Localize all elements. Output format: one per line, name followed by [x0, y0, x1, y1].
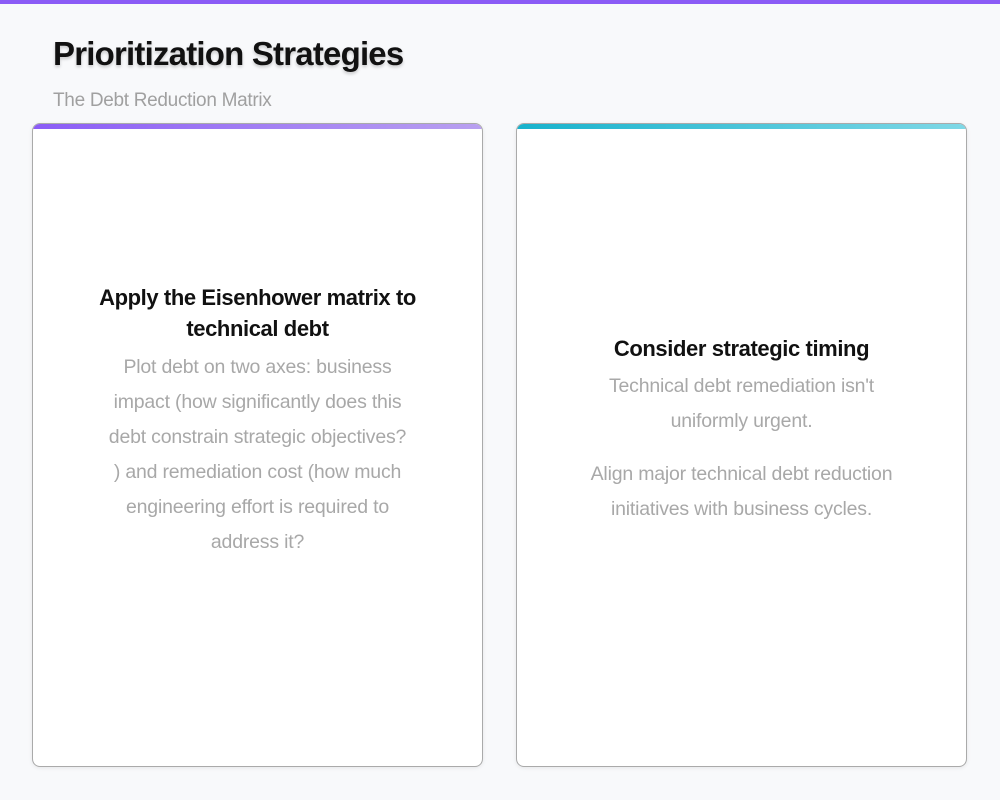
text: timing body: Technical debt remediation isn't: [609, 375, 874, 397]
panel: eisenhower matrix: [32, 123, 483, 767]
text: timing body: uniformly urgent.: [671, 410, 812, 432]
subtitle: The Debt Reduction Matrix: [53, 90, 272, 111]
heading: eisenhower: technical debt: [186, 316, 329, 341]
text: eisenhower body: debt constrain strategic objectives?: [109, 426, 406, 448]
text: eisenhower body: [109, 356, 406, 553]
heading: timing: Consider strategic timing: [614, 336, 869, 361]
title: Prioritization Strategies: [53, 35, 403, 72]
text: eisenhower body: Plot debt on two axes: business: [123, 356, 392, 378]
text: eisenhower body: engineering effort is required to: [126, 496, 389, 518]
panel: strategic timing: [516, 123, 967, 767]
heading: eisenhower: Apply the Eisenhower matrix to: [99, 285, 416, 310]
text: eisenhower body: address it?: [211, 531, 304, 553]
text: timing body: Align major technical debt reduction: [591, 463, 892, 485]
heading: eisenhower: [99, 285, 416, 341]
text: timing body: [590, 375, 892, 520]
text: eisenhower body: impact (how significantly does this: [114, 391, 401, 413]
text: eisenhower body: ) and remediation cost (how much: [114, 461, 401, 483]
text: timing body: initiatives with business cycles.: [611, 498, 872, 520]
